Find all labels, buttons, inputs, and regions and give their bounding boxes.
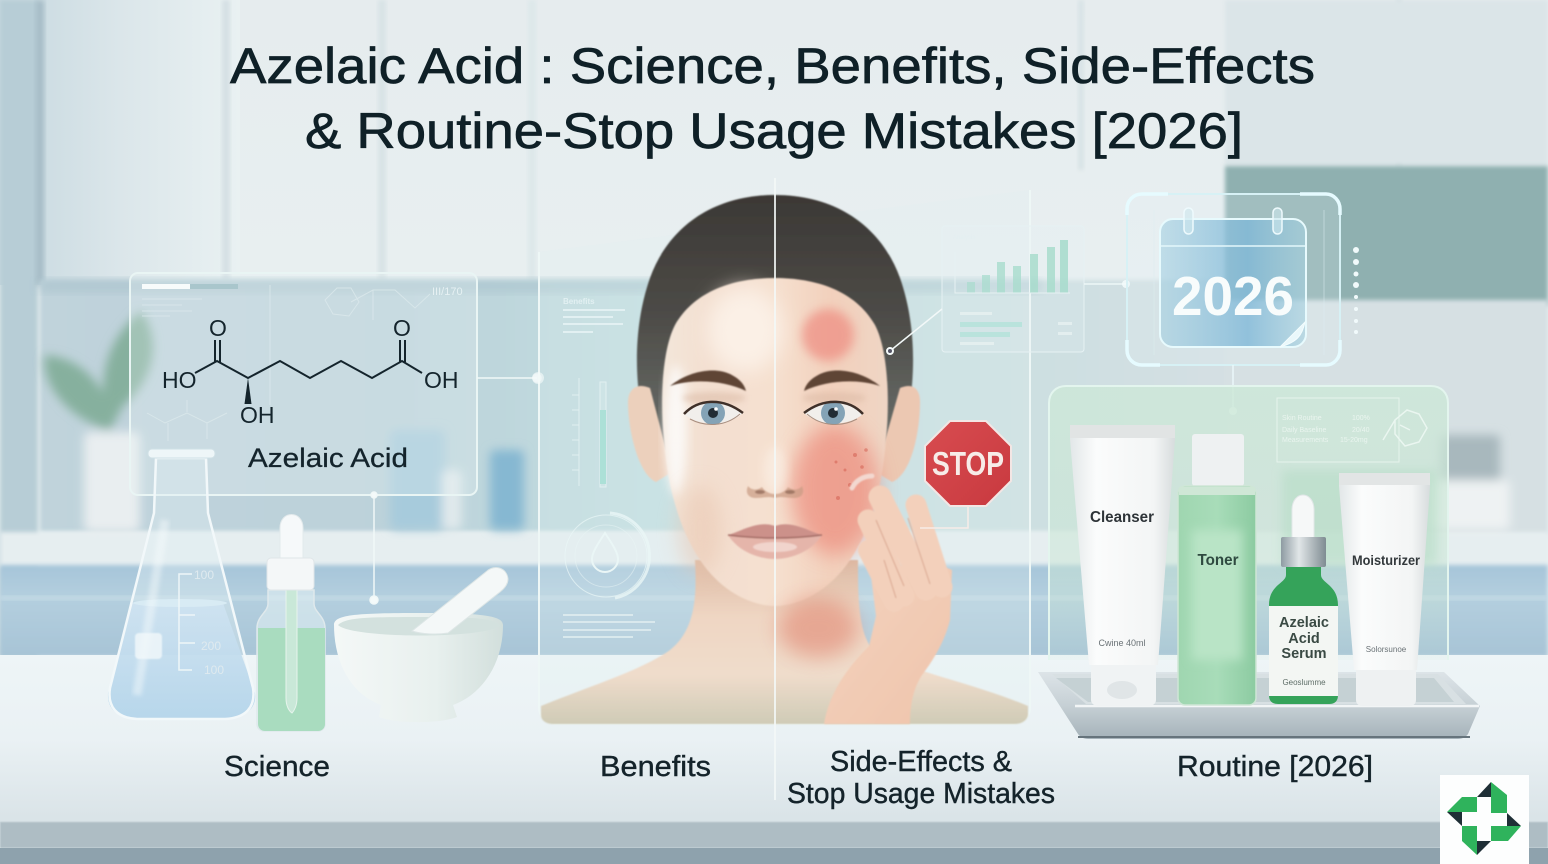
product: toner bottle: Toner: [1198, 552, 1238, 569]
label: side-effects and stop usage mistakes: [787, 746, 1055, 810]
icon: stop sign: [920, 421, 1011, 528]
hand: [824, 476, 952, 724]
panel: science molecule: O: [393, 315, 411, 341]
panel: science molecule: OH: [240, 402, 274, 428]
icon: erlenmeyer flask: 100: [204, 663, 224, 677]
redness: neck: [778, 598, 858, 658]
icon: stop sign: STOP: [932, 445, 1004, 482]
product: moisturizer tube: Solorsunoe: [1366, 645, 1407, 654]
illustration: woman's face split view: [541, 195, 1028, 724]
holo text: lower notes: [563, 614, 655, 638]
product: cleanser tube: Cleanser: [1090, 509, 1154, 526]
panel: science molecule: O: [209, 315, 227, 341]
panel: routine hologram: [1049, 386, 1448, 660]
connector: science panel to dot: [370, 374, 541, 604]
center divider line: [774, 178, 776, 800]
bar chart: [967, 240, 1068, 293]
product: cleanser tube: Cwine 40ml: [1098, 638, 1146, 648]
routine data card: Skin Routine: [1282, 415, 1322, 422]
panel: science molecule: [130, 273, 477, 495]
label: side-effects and stop usage mistakes: Side-Effects &: [830, 746, 1012, 778]
calendar: [1160, 219, 1306, 347]
routine data card: 15-20mg: [1340, 437, 1368, 444]
product: azelaic acid serum bottle: Acid: [1288, 631, 1320, 647]
molecule: azelaic acid structure: [195, 340, 422, 378]
backsplash shelf: [0, 532, 1548, 568]
panel label: Azelaic Acid: [248, 443, 408, 473]
product: azelaic acid serum bottle: Geoslumme: [1282, 678, 1326, 687]
panel: skin analysis chart: Analysis: [953, 235, 975, 241]
table top: [0, 655, 1548, 823]
label: science: Science: [224, 751, 330, 783]
panel: skin analysis chart: [887, 226, 1130, 354]
title: [230, 38, 1315, 159]
lips: [728, 524, 822, 559]
panel: benefits and side-effects comparison: [532, 190, 1030, 724]
panel: 2026 calendar hologram: [1127, 194, 1359, 415]
hair: [637, 195, 913, 450]
icon: water drop ring: [565, 513, 649, 598]
product: moisturizer tube: Moisturizer: [1352, 552, 1420, 568]
product: moisturizer tube: [1339, 473, 1430, 706]
icon: dropper bottle: [257, 514, 325, 731]
logo: [1440, 775, 1529, 864]
routine data card: Measurements: [1282, 437, 1329, 444]
eyes: [684, 401, 863, 425]
status dots: [1353, 247, 1359, 334]
product: toner bottle: [1178, 434, 1256, 705]
redness: forehead: [802, 309, 854, 361]
panel: science molecule: OH: [424, 367, 458, 393]
nose: [747, 446, 803, 498]
product: cleanser tube: [1070, 425, 1175, 706]
label: side-effects and stop usage mistakes: Stop Usage Mistakes: [787, 778, 1055, 810]
holo text: benefits: [563, 297, 625, 333]
icon: metal tray: [1038, 672, 1480, 739]
routine data card: [1277, 398, 1427, 462]
title: & Routine-Stop Usage Mistakes [2026]: [305, 103, 1243, 159]
label: routine 2026: Routine [2026]: [1177, 751, 1373, 783]
panel: 2026 calendar hologram: 2026: [1172, 265, 1294, 327]
eye shadow: [682, 392, 866, 404]
icon: erlenmeyer flask: [108, 449, 255, 719]
routine data card: 20/40: [1352, 427, 1370, 434]
plant: [44, 311, 153, 532]
icon: erlenmeyer flask: 100: [194, 568, 214, 582]
panel: science molecule: III/170: [432, 286, 463, 298]
product: azelaic acid serum bottle: Serum: [1281, 646, 1327, 662]
neck and shoulders: [541, 560, 1028, 724]
redness: cheek: [791, 425, 879, 555]
label: benefits: Benefits: [600, 751, 711, 783]
molecule wedge bond: [244, 378, 252, 404]
product: azelaic acid serum bottle: [1269, 495, 1338, 704]
blurred bottles: [390, 430, 524, 530]
left cheek highlight: [665, 365, 687, 495]
holo chart: gauge: [572, 378, 606, 487]
product: azelaic acid serum bottle: Azelaic: [1279, 615, 1329, 631]
holo text: benefits: Benefits: [563, 297, 595, 306]
redness spots: [834, 448, 868, 500]
table edge: [0, 822, 1548, 848]
cheek shading: [678, 485, 722, 575]
blurred machine: [1425, 435, 1510, 530]
icon: erlenmeyer flask: 200: [201, 639, 221, 653]
routine data card: 100%: [1352, 415, 1370, 422]
face skin: [662, 278, 888, 606]
ears: [628, 386, 672, 482]
title: Azelaic Acid : Science, Benefits, Side-Effects: [230, 38, 1315, 94]
panel: science molecule: HO: [162, 367, 196, 393]
routine data card: Daily Baseline: [1282, 427, 1326, 434]
eyebrows: [670, 370, 880, 391]
icon: mortar and pestle: [334, 568, 508, 722]
